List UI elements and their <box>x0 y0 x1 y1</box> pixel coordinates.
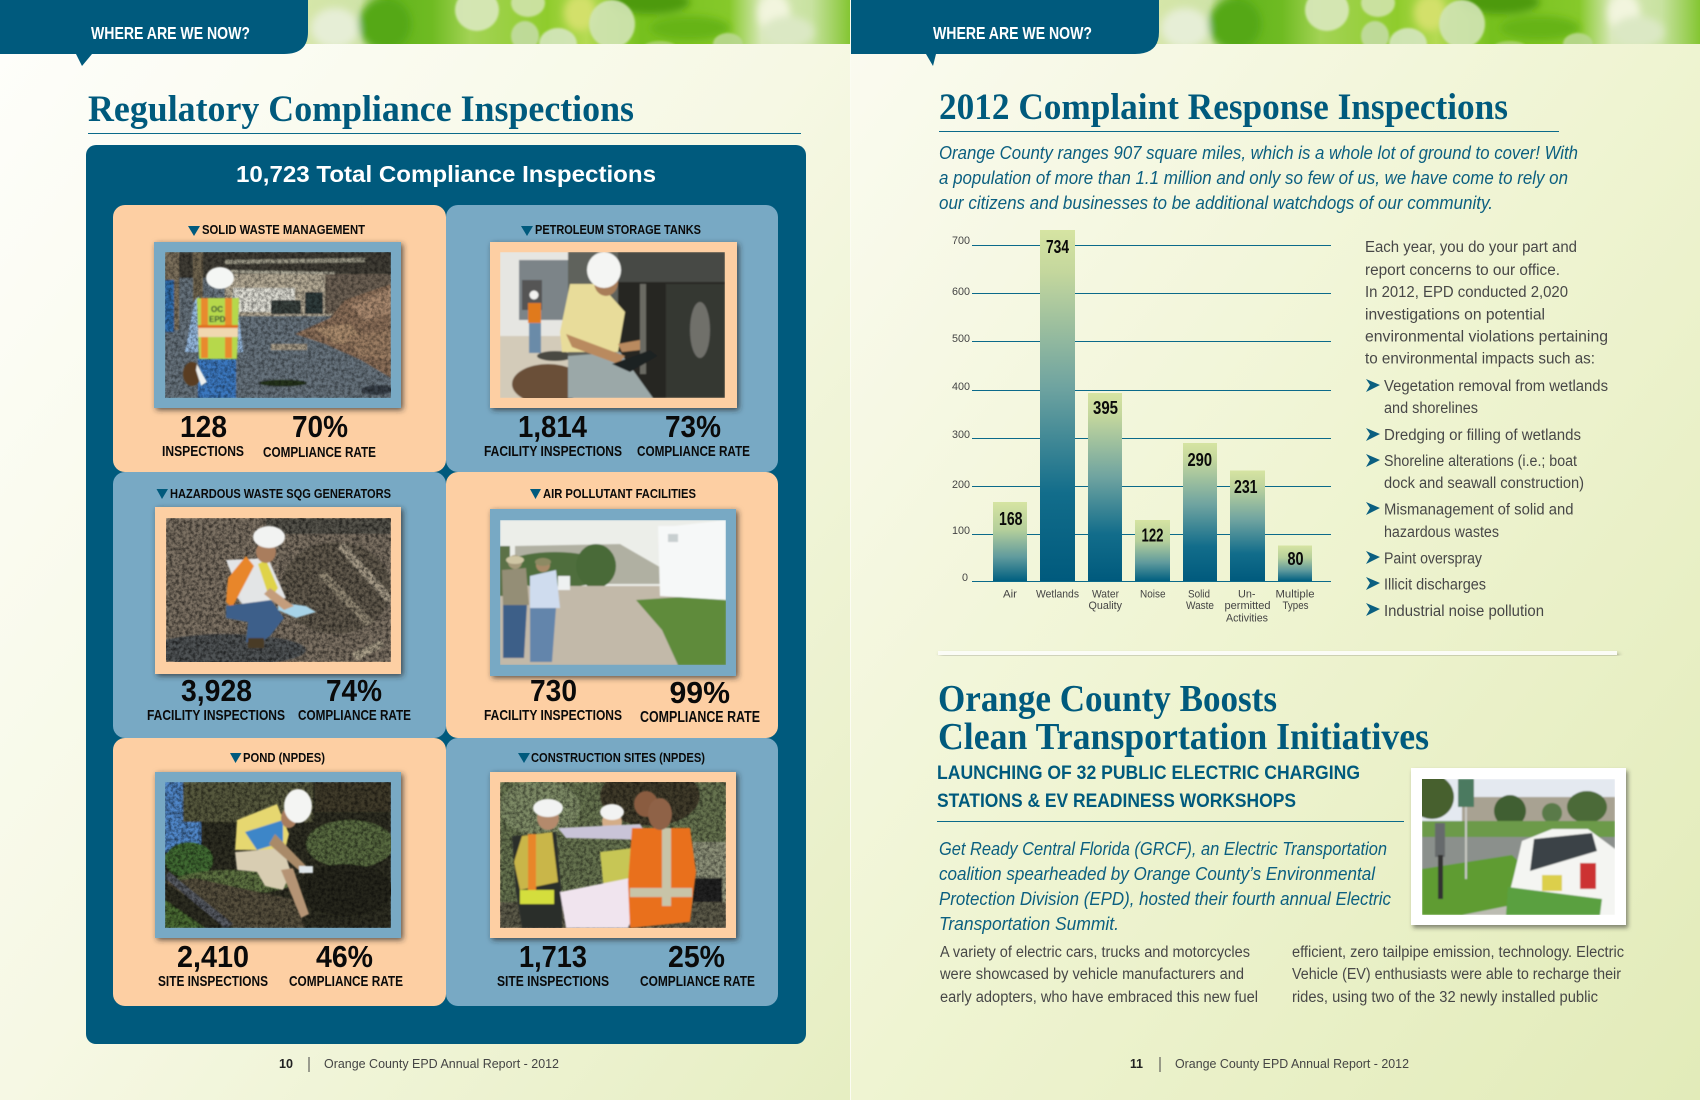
bar: wetlands 734: Wetlands <box>1036 588 1079 600</box>
bar: water quality 395: Quality <box>1088 600 1122 612</box>
tile heading: HAZARDOUS WASTE SQG GENERATORS <box>170 487 391 501</box>
stats <box>158 939 403 990</box>
footer: page 11: 11 <box>1130 1057 1143 1071</box>
bar: solid waste 290 <box>1183 443 1217 612</box>
stats: SITE INSPECTIONS <box>497 973 609 990</box>
photo: inspector in waste facility: EPD <box>209 315 226 324</box>
bar: unpermitted activities 231: Activities <box>1226 612 1268 624</box>
bar: noise 122: 122 <box>1142 524 1164 546</box>
stats: 1,713 <box>519 939 587 974</box>
italic paragraph: get ready central florida: Protection Division (EPD), hosted their fourth annual Electric <box>939 888 1392 909</box>
stats: COMPLIANCE RATE <box>640 709 760 726</box>
bar: unpermitted activities 231: permitted <box>1224 600 1270 612</box>
footer: page 10: 10 <box>279 1057 293 1071</box>
tile: pond npdes <box>113 738 446 1006</box>
header tab: WHERE ARE WE NOW? <box>91 23 250 43</box>
tile heading: PETROLEUM STORAGE TANKS <box>535 223 701 237</box>
tile: air pollutant facilities <box>446 472 778 738</box>
stats: 70% <box>292 409 348 444</box>
stats: INSPECTIONS <box>162 443 244 460</box>
stats: 25% <box>668 939 725 974</box>
divider bar <box>938 651 1617 655</box>
photo: inspector in waste facility <box>154 242 401 408</box>
heading: clean transportation initiatives <box>938 678 1429 758</box>
stats: 99% <box>670 675 730 710</box>
stats: FACILITY INSPECTIONS <box>484 707 622 724</box>
heading: clean transportation initiatives: Orange County Boosts <box>938 678 1277 720</box>
bulleted list: environmental impacts: Industrial noise pollution <box>1384 603 1544 620</box>
panel heading: 10,723 Total Compliance Inspections <box>236 161 656 187</box>
y axis gridlines and labels: 100 <box>952 525 970 537</box>
footer: page 11: Orange County EPD Annual Report - 2012 <box>1175 1056 1409 1071</box>
stats: 46% <box>316 939 373 974</box>
stats: 3,928 <box>181 673 252 708</box>
bulleted list: environmental impacts: Illicit discharges <box>1384 576 1486 594</box>
stats: 73% <box>665 409 721 444</box>
text block: each year: report concerns to our office. <box>1365 262 1560 279</box>
stats: 2,410 <box>177 939 249 974</box>
footer: page 10: Orange County EPD Annual Report - 2012 <box>324 1056 559 1071</box>
tile heading: SOLID WASTE MANAGEMENT <box>202 223 365 237</box>
bulleted list: environmental impacts: and shorelines <box>1384 400 1478 417</box>
bar: solid waste 290: Solid <box>1188 588 1210 600</box>
intro paragraph: Orange County ranges 907 square miles, which is a whole lot of ground to cover! With <box>939 142 1578 163</box>
bar: water quality 395: 395 <box>1093 397 1118 418</box>
bar: solid waste 290: Waste <box>1186 600 1214 612</box>
stats <box>147 673 411 724</box>
tile: hazardous waste sqg generators <box>113 472 446 738</box>
panel: right page header band <box>851 0 1700 66</box>
italic paragraph: get ready central florida: Get Ready Central Florida (GRCF), an Electric Transportation <box>939 838 1387 859</box>
stats: COMPLIANCE RATE <box>640 973 755 990</box>
bulleted list: environmental impacts: hazardous wastes <box>1384 524 1499 541</box>
bar: air 168: 168 <box>999 508 1022 529</box>
photo: electric car at charging station <box>1410 768 1626 925</box>
bar: unpermitted activities 231: Un- <box>1238 588 1256 600</box>
body text column 1: were showcased by vehicle manufacturers and <box>939 966 1244 983</box>
heading: clean transportation initiatives: Clean Transportation Initiatives <box>938 716 1429 758</box>
stats: 128 <box>180 409 227 444</box>
stats: 74% <box>326 673 382 708</box>
bar: noise 122: Noise <box>1140 588 1166 600</box>
text block: each year: environmental violations pertaining <box>1365 328 1608 346</box>
bar: air 168: Air <box>1003 588 1017 600</box>
bulleted list: environmental impacts: Dredging or filling of wetlands <box>1384 427 1581 444</box>
body text column 1: A variety of electric cars, trucks and motorcycles <box>940 944 1250 961</box>
y axis gridlines and labels: 700 <box>952 235 970 247</box>
bulleted list: environmental impacts: Shoreline alterations (i.e.; boat <box>1384 453 1578 470</box>
subheading: charging stations: STATIONS & EV READINESS WORKSHOPS <box>937 791 1296 812</box>
body text column 2: efficient, zero tailpipe emission, technology. Electric <box>1292 944 1624 961</box>
bulleted list: environmental impacts <box>1366 378 1608 620</box>
heading: 2012 complaint response inspections: 2012 Complaint Response Inspections <box>939 87 1508 128</box>
text block: each year: to environmental impacts such as: <box>1365 350 1595 368</box>
bar: wetlands 734 <box>1036 230 1079 600</box>
bar: water quality 395 <box>1088 393 1122 612</box>
photo: inspector crouching <box>146 507 401 674</box>
tile: construction sites npdes <box>446 738 778 1006</box>
stats: COMPLIANCE RATE <box>298 707 411 724</box>
stats <box>162 409 376 461</box>
y axis gridlines and labels: 600 <box>952 286 970 298</box>
stats <box>497 939 755 990</box>
subheading: charging stations <box>937 763 1404 822</box>
body text column 1 <box>939 944 1258 1006</box>
stats: COMPLIANCE RATE <box>637 443 750 460</box>
bar: air 168 <box>993 502 1027 600</box>
photo: inspector sampling pond <box>155 772 401 938</box>
bar: water quality 395: Water <box>1092 588 1119 600</box>
body text column 2 <box>1292 944 1624 1006</box>
text block: each year <box>1365 239 1608 368</box>
tile: petroleum storage tanks <box>446 205 778 472</box>
text block: each year: investigations on potential <box>1365 306 1545 324</box>
italic paragraph: get ready central florida: Transportation Summit. <box>939 913 1119 934</box>
heading: regulatory compliance inspections: Regulatory Compliance Inspections <box>88 89 634 130</box>
photo: inspector with laptop <box>490 242 737 408</box>
intro paragraph <box>939 142 1578 213</box>
body text column 2: Vehicle (EV) enthusiasts were able to recharge their <box>1292 966 1621 983</box>
subheading: charging stations: LAUNCHING OF 32 PUBLIC ELECTRIC CHARGING <box>937 763 1360 784</box>
tile: solid waste management <box>113 205 446 472</box>
text block: each year: Each year, you do your part and <box>1365 239 1577 256</box>
header tab: WHERE ARE WE NOW? <box>933 23 1092 43</box>
y axis gridlines and labels: 300 <box>952 429 970 441</box>
stats <box>484 673 760 726</box>
photo: team reviewing plans <box>490 766 736 938</box>
bulleted list: environmental impacts: Paint overspray <box>1384 550 1482 568</box>
intro paragraph: a population of more than 1.1 million and only so few of us, we have come to rely on <box>939 167 1568 188</box>
photo: two inspectors on road <box>490 509 736 676</box>
bulleted list: environmental impacts: Mismanagement of solid and <box>1384 502 1574 518</box>
bulleted list: environmental impacts: dock and seawall construction) <box>1384 475 1584 492</box>
tile heading: POND (NPDES) <box>243 751 325 765</box>
body text column 1: early adopters, who have embraced this new fuel <box>940 989 1258 1006</box>
bulleted list: environmental impacts: Vegetation removal from wetlands <box>1384 378 1608 395</box>
stats <box>484 409 750 460</box>
intro paragraph: our citizens and businesses to be additional watchdogs of our community. <box>939 192 1493 213</box>
photo: inspector in waste facility: OC <box>211 305 223 314</box>
stats: COMPLIANCE RATE <box>289 973 403 990</box>
panel: compliance inspections <box>86 145 806 1044</box>
stats: FACILITY INSPECTIONS <box>147 707 285 724</box>
text block: each year: In 2012, EPD conducted 2,020 <box>1365 284 1568 301</box>
bar: multiple types 80: Multiple <box>1276 588 1314 600</box>
body text column 2: rides, using two of the 32 newly installed public <box>1292 989 1598 1006</box>
header tab <box>851 0 1159 66</box>
y axis gridlines and labels: 400 <box>952 381 970 393</box>
stats: COMPLIANCE RATE <box>263 444 376 461</box>
bar: unpermitted activities 231: 231 <box>1234 476 1258 497</box>
bar: multiple types 80: Types <box>1282 600 1309 612</box>
italic paragraph: get ready central florida: coalition spearheaded by Orange County’s Environmental <box>939 863 1376 884</box>
italic paragraph: get ready central florida <box>939 838 1392 934</box>
bar: noise 122 <box>1135 520 1170 600</box>
bar: multiple types 80 <box>1276 546 1314 612</box>
y axis gridlines and labels: 0 <box>962 572 968 584</box>
bar: wetlands 734: 734 <box>1046 236 1070 257</box>
y axis gridlines and labels <box>952 235 1331 584</box>
tile heading: CONSTRUCTION SITES (NPDES) <box>531 751 705 765</box>
tile heading: AIR POLLUTANT FACILITIES <box>543 487 696 501</box>
bar: solid waste 290: 290 <box>1188 449 1212 470</box>
header tab <box>0 0 308 66</box>
y axis gridlines and labels: 500 <box>952 333 970 345</box>
stats: SITE INSPECTIONS <box>158 973 268 990</box>
bar chart: complaint inspections by type <box>952 230 1331 624</box>
stats: 1,814 <box>518 409 588 444</box>
panel: left page header band <box>0 0 850 66</box>
bar: multiple types 80: 80 <box>1288 548 1304 569</box>
y axis gridlines and labels: 200 <box>952 479 970 491</box>
stats: 730 <box>530 673 577 708</box>
bar: unpermitted activities 231 <box>1224 470 1270 624</box>
stats: FACILITY INSPECTIONS <box>484 443 622 460</box>
